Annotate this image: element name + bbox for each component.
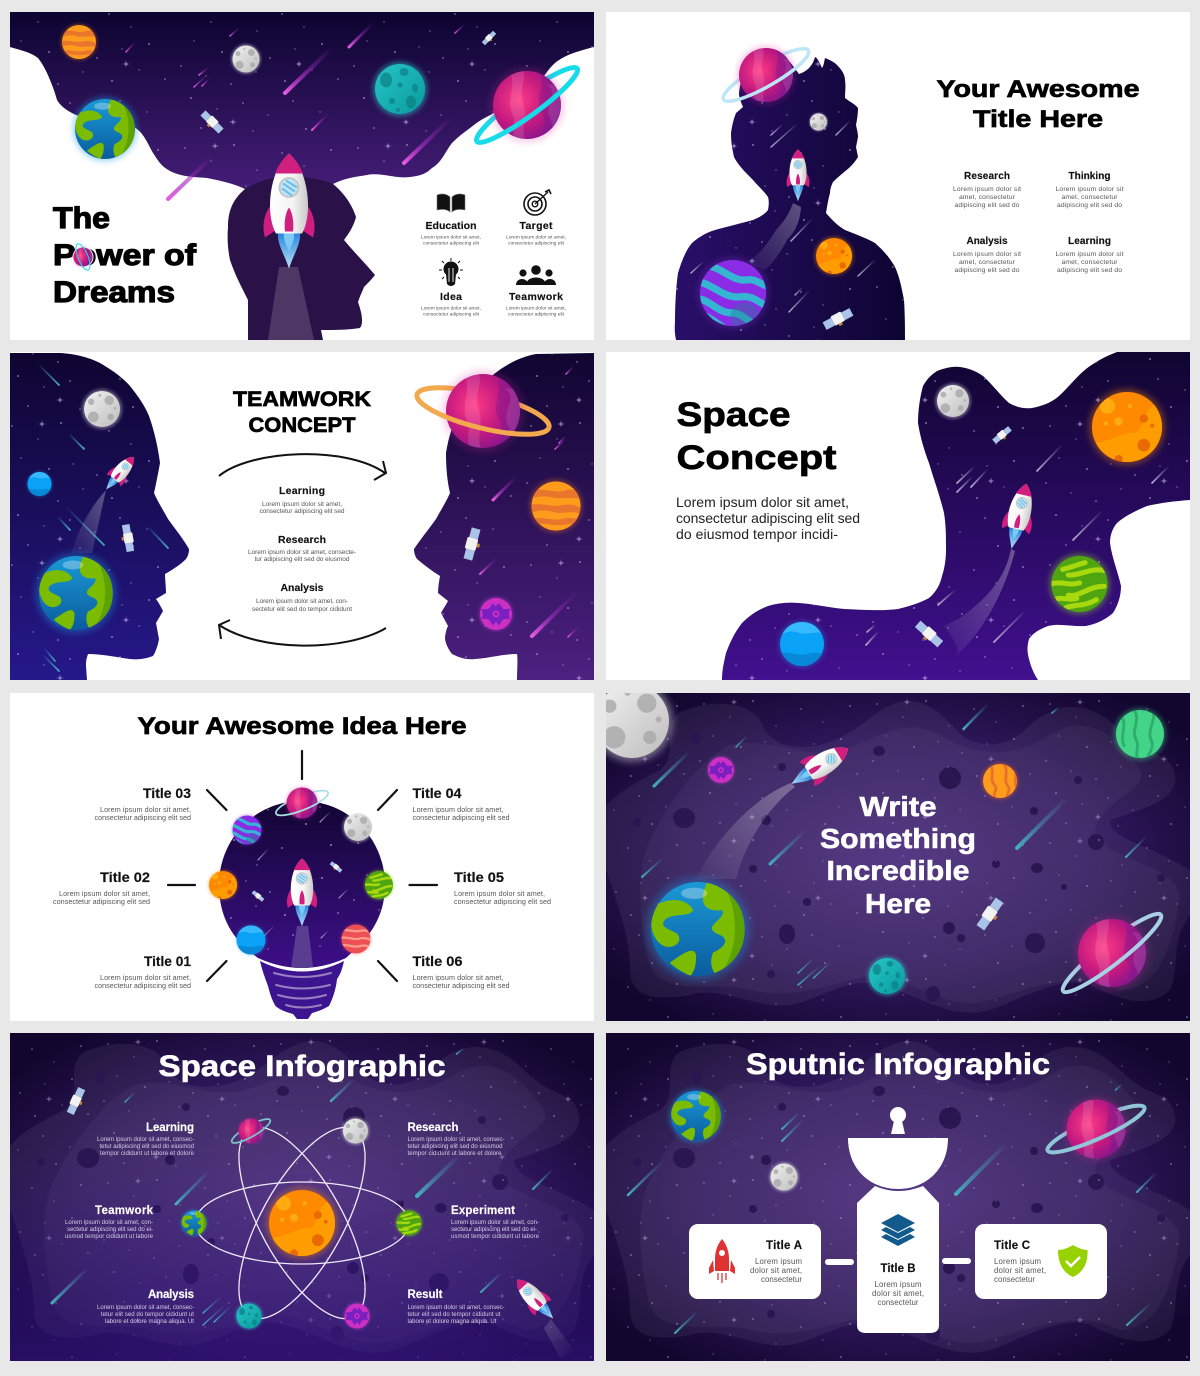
item: Analysis [97,1289,194,1325]
card A: dolor sit amet, [750,1266,802,1275]
item: Learning: adipiscing elit sed do [1057,267,1122,274]
card B: dolor sit amet, [872,1289,924,1298]
meteors [258,812,348,938]
card C: consectetur [994,1275,1035,1284]
item: Teamwork: usmod tempor cididunt ut labore [65,1233,154,1240]
meteors [691,121,875,312]
title: Your Awesome Idea Here [138,713,466,740]
title: TEAMWORK [233,388,371,411]
space hair shape [10,12,594,189]
planet: magenta gear [344,1302,370,1330]
feature: Target: Target [520,220,553,232]
feature: Education: consectetur adipiscing elit [423,240,480,246]
title: Your Awesome [936,76,1140,103]
item: Learning: tempor cididunt ut labore et dolore [100,1150,195,1157]
sun [266,1187,338,1259]
item: Title 03: Title 03 [143,785,191,801]
card C: Lorem ipsum [994,1257,1041,1266]
rocket [517,1280,554,1318]
item: Experiment [451,1205,540,1240]
planet: earth [73,97,137,161]
planet: earth [180,1210,208,1236]
title planet [72,242,94,272]
item: Experiment: sectetur adipiscing elit sed do ei- [451,1226,537,1233]
planet: teal [372,62,428,116]
item: Teamwork: Teamwork [95,1205,154,1217]
planet: ringed pink [273,786,331,820]
head silhouette [228,177,375,340]
item: Teamwork: Lorem ipsum dolor sit amet, con- [65,1219,153,1226]
feature: Teamwork: Lorem ipsum dolor sit amet, [506,306,566,312]
item: Title 05: Lorem ipsum dolor sit amet, [454,889,545,898]
title: Sputnic Infographic [746,1048,1050,1081]
body text: do eiusmod tempor incidi- [676,526,838,542]
item: Title 06: Title 06 [412,953,463,969]
planet: red [340,923,372,955]
meteors [866,446,1168,645]
panel: Teamwork Concept [10,352,594,680]
feature: Education: Education [426,220,476,232]
planet: orange striped [530,480,582,532]
item: Analysis: Lorem ipsum dolor sit amet, consec- [97,1304,194,1311]
rocket trail [544,1319,571,1358]
item: Analysis: Lorem ipsum dolor sit amet, con- [256,598,348,605]
item: Analysis: adipiscing elit sed do [954,267,1020,274]
item: Research: Lorem ipsum dolor sit amet, consec- [408,1136,504,1143]
item: Analysis: tetur elit sed do tempor cididunt ut [101,1311,194,1318]
icon: green shield [1058,1245,1088,1277]
planet: purple [696,257,770,331]
item: Thinking: Lorem ipsum dolor sit [1056,186,1124,193]
meteors [642,704,1147,985]
item: Research: tempor cididunt ut labore et dolore [408,1150,502,1157]
right meteors [480,366,580,637]
title: Dreams [53,276,175,309]
item: Teamwork: sectetur adipiscing elit sed do ei- [67,1226,153,1233]
card C: Title C [994,1240,1030,1252]
rocket [787,149,809,201]
planet: blue [27,471,52,497]
item: Title 03 [94,785,191,822]
feature: Idea: Idea [440,291,462,303]
item: Learning: Learning [1068,236,1111,247]
item: Title 03: consectetur adipiscing elit sed [94,813,191,822]
rocket trail [696,783,795,879]
feature: Education: Lorem ipsum dolor sit amet, [421,234,481,240]
planet: moon [606,693,678,766]
icon: idea bulb [439,258,463,286]
title: Concept [676,439,836,477]
item: Title 03: Lorem ipsum dolor sit amet, [100,805,191,814]
item: Teamwork [65,1205,154,1240]
title: Write [860,791,936,822]
planet: ringed pink [1044,1097,1148,1161]
item: Title 06: consectetur adipiscing elit sed [412,981,510,990]
planet: blue [778,620,826,668]
connectors [825,1258,971,1265]
satellite [462,527,483,561]
body text: consectetur adipiscing elit sed [676,510,860,526]
item: Title 04 [412,785,510,822]
rocket trail [944,549,1015,656]
item: Research: Research [408,1122,458,1134]
bulb globe [220,802,384,968]
item: Learning: Lorem ipsum dolor sit amet, consec- [97,1136,194,1143]
title: Space Infographic [158,1050,446,1083]
item: Research: Lorem ipsum dolor sit amet, consecte- [248,549,356,556]
item: Title 01: consectetur adipiscing elit sed [94,981,191,990]
rocket [263,154,315,268]
item: Research: adipiscing elit sed do [954,202,1020,209]
card A [689,1224,821,1299]
title: Something [820,823,976,854]
item: Experiment: usmod tempor cididunt ut labore [451,1233,540,1240]
panel: Space Concept [606,352,1190,680]
orbit rings [198,1126,406,1320]
item: Title 02: consectetur adipiscing elit sed [53,897,150,906]
body text [676,494,860,542]
item: Thinking: Thinking [1068,171,1110,182]
planet: moon [82,389,122,429]
item: Title 01 [94,953,191,990]
planet: moon [809,113,828,131]
feature: Idea: consectetur adipiscing elit [423,312,480,318]
item: Title 05 [454,869,551,906]
satellite [976,898,1004,930]
rocket [792,747,848,786]
planet: earth [669,1089,723,1143]
sputnik dish [848,1107,948,1189]
planet: orange [208,870,238,900]
panel: The Power of Dreams [10,12,594,340]
planet: ringed pink [470,60,584,150]
arrow: top curve [219,454,386,480]
title: Power of [53,239,197,272]
item: Analysis: amet, consectetur [959,259,1016,266]
meteors [126,23,465,199]
item: Research: Research [964,171,1010,182]
planet: moon [935,383,971,419]
feature: Idea: Lorem ipsum dolor sit amet, [421,306,481,312]
item: Learning [1056,236,1124,274]
planet: moon [231,44,261,74]
space shape [720,352,1190,680]
meteors [52,1048,553,1325]
item: Research: amet, consectetur [959,194,1016,201]
spokes [168,751,437,981]
feature: Teamwork: Teamwork [509,291,563,303]
satellite [822,307,855,332]
planet: moon [769,1162,799,1192]
icon: target [524,190,551,215]
item: Learning: Lorem ipsum dolor sit amet, [262,501,342,508]
feature: Target [506,220,566,246]
title: CONCEPT [248,414,356,437]
item: Learning [97,1122,195,1157]
planet: moon [343,812,373,842]
satellite [119,524,135,553]
item: Learning: Lorem ipsum dolor sit [1056,251,1124,258]
planet: earth [36,553,116,633]
item: Result: tetur elit sed do tempor cididunt ut [408,1311,501,1318]
meteors [628,1084,1157,1333]
planet: magenta gear [479,597,513,631]
item: Research: tur adipiscing elit sed do eiusmod [254,556,350,563]
planet: ringed pink [1060,912,1164,994]
planet: emerald [1114,708,1166,760]
item: Title 04: Title 04 [412,785,462,801]
title: Space [676,396,790,434]
planet: ringed pink [413,370,553,452]
item: Experiment: Experiment [451,1205,515,1217]
item: Research: tetur adipiscing elit sed do eiusmod [408,1143,502,1150]
card B [857,1186,939,1333]
planet: orange [61,24,97,60]
satellite small [481,30,497,46]
rocket trail [268,267,314,340]
feature: Education [421,220,481,246]
planet: ringed pink [718,41,814,109]
item: Title 04: Lorem ipsum dolor sit amet, [412,805,504,814]
item: Thinking [1056,171,1124,209]
item: Analysis: labore et dolore magna aliqua. Ut [105,1318,194,1325]
feature: Target: consectetur adipiscing elit [508,240,565,246]
planet: ringed pink [230,1116,272,1146]
item: Title 01: Title 01 [144,953,191,969]
planet: green [1049,554,1110,614]
item: Learning: Learning [279,485,325,497]
item: Title 06: Lorem ipsum dolor sit amet, [412,973,504,982]
item: Title 04: consectetur adipiscing elit sed [412,813,510,822]
planet: teal [235,1302,263,1330]
item: Result: labore et dolore magna aliqua. Ut [408,1318,497,1325]
item: Learning: consectetur adipiscing elit sed [260,508,345,515]
item: Analysis: Analysis [148,1289,194,1301]
rocket [287,858,317,926]
feature: Teamwork: consectetur adipiscing elit [508,312,565,318]
item: Result: Result [408,1289,443,1301]
card B: consectetur [878,1298,919,1307]
item: Learning: Learning [146,1122,194,1134]
item: Analysis [953,236,1021,274]
item: Analysis: Analysis [280,582,324,594]
left head [10,352,200,680]
arrow: bottom curve [219,620,386,646]
panel: Space Infographic [10,1033,594,1361]
item: Experiment: Lorem ipsum dolor sit amet, con- [451,1219,539,1226]
planet: green [396,1210,422,1236]
item: Title 02: Lorem ipsum dolor sit amet, [59,889,150,898]
item: Analysis: sectetur elit sed do tempor cididunt [252,606,352,613]
item: Research [953,171,1021,209]
title: Incredible [826,855,970,886]
planet: purple [231,814,263,847]
satellite [66,1087,86,1115]
satellites [251,861,343,903]
item: Research: Lorem ipsum dolor sit [953,186,1021,193]
title [53,202,197,309]
card B: Title B [880,1263,916,1275]
rocket [997,480,1041,552]
rocket [99,451,141,496]
title [820,791,976,919]
title [676,396,836,477]
planet: orange striped [982,763,1018,799]
bust silhouette [670,40,910,340]
item: Research [408,1122,504,1157]
panel: Your Awesome Idea Here [10,693,594,1021]
planet: blue [235,924,267,956]
item: Thinking: adipiscing elit sed do [1057,202,1122,209]
card A: consectetur [761,1275,802,1284]
item: Title 05: consectetur adipiscing elit sed [454,897,551,906]
card B: Lorem ipsum [874,1280,922,1289]
icon: book [437,194,465,212]
satellite top [992,425,1013,445]
item: Analysis: Analysis [966,236,1008,247]
title: Here [865,888,931,919]
satellite [199,110,224,135]
title: The [53,202,110,235]
item: Title 05: Title 05 [454,869,504,885]
icon: team [516,265,556,285]
rocket trail [71,490,106,553]
card A: Lorem ipsum [755,1257,802,1266]
item: Title 06 [412,953,510,990]
item: Research [248,534,356,563]
item: Learning: amet, consectetur [1062,259,1118,266]
item: Title 02 [53,869,150,906]
item: Analysis [252,582,352,613]
icon: layers [881,1214,915,1246]
planet: earth [647,878,749,980]
bulb base [260,961,344,1019]
item: Thinking: amet, consectetur [1062,194,1118,201]
title [233,388,371,437]
satellite bottom [913,620,944,649]
feature: Target: Lorem ipsum dolor sit amet, [506,234,566,240]
planet: teal [867,956,907,996]
card C: dolor sit amet, [994,1266,1046,1275]
panel: Your Awesome Title Here [606,12,1190,340]
feature: Teamwork [506,291,566,318]
item: Analysis: Lorem ipsum dolor sit [953,251,1021,258]
body text: Lorem ipsum dolor sit amet, [676,494,849,510]
planet: green [364,870,394,900]
item: Title 02: Title 02 [100,869,150,885]
card C [975,1224,1107,1299]
item: Title 01: Lorem ipsum dolor sit amet, [100,973,191,982]
panel: Write Something Incredible Here [591,680,1190,1021]
item: Result: Lorem ipsum dolor sit amet, consec- [408,1304,504,1311]
planet: moon [342,1117,369,1145]
rocket trail [747,203,801,270]
planet: orange [1089,389,1165,465]
title: Title Here [973,106,1103,133]
left meteors [38,364,168,671]
icon: red rocket [709,1239,735,1283]
planet: magenta gear [707,756,735,784]
item: Learning: tetur adipiscing elit sed do eiusmod [100,1143,194,1150]
item: Result [408,1289,504,1325]
planet: orange [815,237,853,275]
panel: Sputnic Infographic [606,1033,1190,1361]
feature: Idea [421,291,481,318]
item: Learning [260,485,345,515]
title [936,76,1140,133]
card A: Title A [766,1240,802,1252]
right head [410,352,594,680]
item: Research: Research [278,534,326,546]
